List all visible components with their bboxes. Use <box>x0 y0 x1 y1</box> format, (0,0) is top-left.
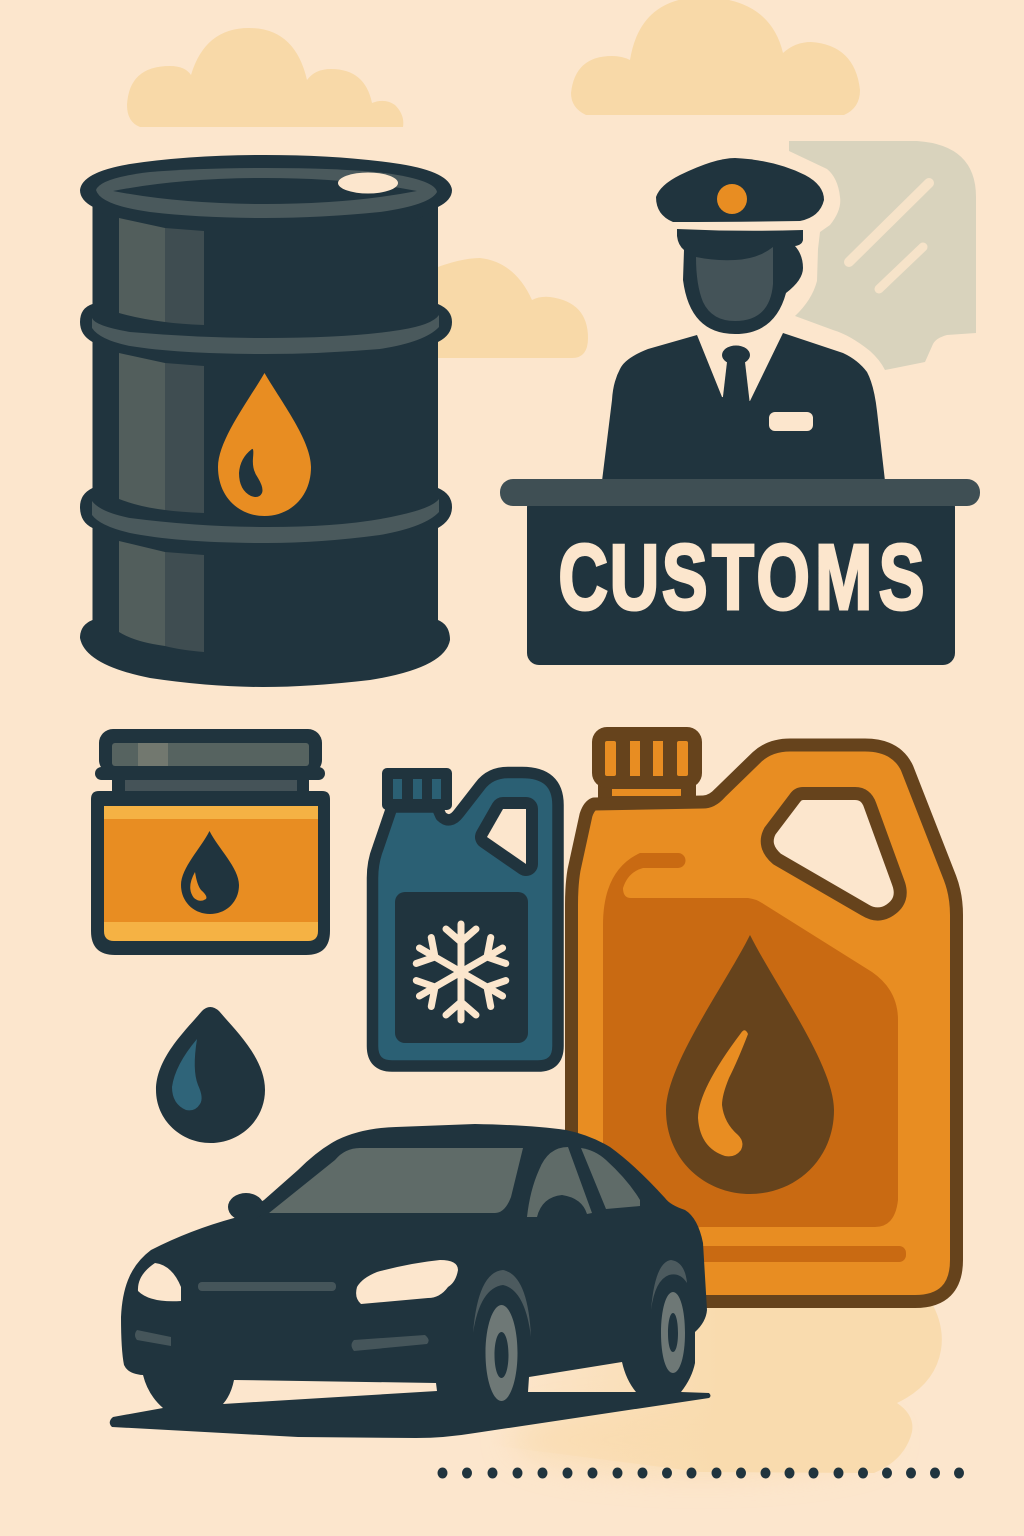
jug cap <box>592 727 702 802</box>
cloud: behind barrel <box>430 258 588 358</box>
desk top <box>500 479 980 506</box>
car rear wheel <box>651 1260 687 1373</box>
jug dark panel <box>603 853 898 1240</box>
icon: snowflake <box>412 924 510 1020</box>
barrel band lower <box>92 499 439 543</box>
cloud: bottom right <box>490 1300 942 1474</box>
motor oil jug <box>572 727 956 1302</box>
antifreeze jug <box>372 768 558 1066</box>
jug lower bar <box>650 1246 906 1262</box>
car body and ground shadow <box>110 1124 710 1438</box>
icon: jar oil drop <box>181 831 239 914</box>
barrel band upper <box>92 315 439 354</box>
barrel body <box>80 180 452 687</box>
customs officer <box>602 158 885 481</box>
car mirror <box>228 1193 264 1221</box>
officer face <box>696 247 773 321</box>
grease jar <box>91 729 330 955</box>
officer head <box>677 229 803 334</box>
customs desk <box>500 479 980 665</box>
jug handle <box>767 794 900 914</box>
cloud: top right <box>571 0 860 115</box>
antifreeze label <box>395 892 528 1043</box>
hat badge <box>717 184 747 214</box>
oil barrel <box>80 155 452 687</box>
jar label <box>104 806 318 941</box>
icon: standalone oil drop <box>156 1007 265 1143</box>
barrel bung cap <box>338 172 398 194</box>
antifreeze body <box>372 772 558 1066</box>
antifreeze cap <box>382 768 452 810</box>
desk sign text: CUSTOMS <box>558 526 925 629</box>
car headlights <box>138 1260 458 1304</box>
car <box>110 1124 710 1438</box>
jar body <box>91 791 330 955</box>
cloud: top left <box>127 28 403 127</box>
dotted line <box>438 1468 964 1478</box>
officer tie <box>722 346 750 405</box>
jar lid <box>99 729 322 774</box>
icon: jug oil drop <box>666 935 834 1194</box>
glass window behind officer <box>789 141 976 370</box>
officer hat <box>656 158 824 222</box>
officer suit <box>602 333 885 481</box>
car windshield <box>269 1148 523 1213</box>
jar neck <box>112 775 309 795</box>
car side windows <box>527 1147 640 1217</box>
barrel top rim <box>80 155 452 228</box>
jug body <box>572 745 956 1302</box>
desk body <box>527 495 955 665</box>
name badge <box>769 412 813 431</box>
car grille and vents <box>135 1282 429 1351</box>
barrel highlights <box>119 218 204 652</box>
icon: barrel oil drop <box>218 373 311 516</box>
car front wheel <box>473 1270 531 1401</box>
antifreeze handle <box>487 809 526 864</box>
